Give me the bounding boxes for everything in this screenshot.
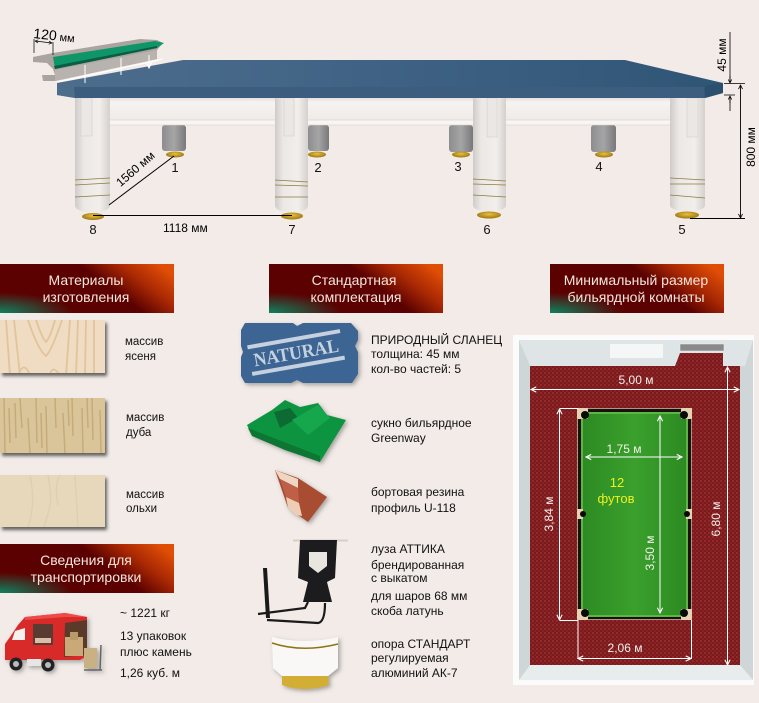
- text: cloth: [371, 416, 472, 445]
- room labels: 5,00 м: [619, 373, 653, 387]
- icon: natural slate: NATURAL: [252, 336, 340, 371]
- leg numbers: 1: [171, 160, 179, 175]
- table size label: футов: [598, 491, 635, 506]
- text: support: [371, 637, 471, 680]
- heading: standard equipment: Стандартная: [312, 272, 396, 288]
- swatch: alder wood: массив: [126, 489, 164, 501]
- dimension: 45 mm: 45 мм: [715, 38, 729, 72]
- room plan: [513, 335, 754, 685]
- text: rubber: бортовая резина: [371, 485, 465, 499]
- icon: red truck: [5, 613, 102, 672]
- text: cloth: Greenway: [371, 431, 426, 445]
- heading: transport info: транспортировки: [31, 569, 141, 585]
- icon: natural slate: [241, 323, 358, 383]
- text: slate: толщина: 45 мм: [371, 347, 460, 361]
- snooker table plan: [577, 408, 692, 620]
- room dimensions: [531, 367, 739, 665]
- window: [610, 344, 663, 358]
- text: support: опора СТАНДАРТ: [371, 637, 471, 651]
- transport text: плюс камень: [120, 645, 192, 659]
- heading: minimum room size: Минимальный размер: [564, 272, 708, 288]
- leg numbers: 6: [483, 222, 491, 237]
- front feet: [82, 212, 699, 220]
- icon: support leg: [272, 637, 338, 689]
- swatch: ash wood: массив: [125, 336, 163, 348]
- dimension: 1560 mm: 1560 мм: [113, 148, 158, 190]
- heading: minimum room size: бильярдной комнаты: [567, 289, 705, 305]
- text: slate: ПРИРОДНЫЙ СЛАНЕЦ: [371, 332, 502, 347]
- pockets: [577, 408, 692, 620]
- swatch: alder wood: [0, 475, 164, 527]
- apron: [75, 98, 705, 125]
- dimension: 800 mm: [690, 85, 758, 218]
- text: cloth: сукно бильярдное: [371, 416, 472, 430]
- swatch: oak wood: дуба: [126, 427, 152, 439]
- leg numbers: 8: [89, 222, 97, 237]
- swatch: oak wood: массив: [126, 412, 164, 424]
- text: rubber: [371, 485, 465, 515]
- text: slate: кол-во частей: 5: [371, 362, 461, 376]
- swatch: ash wood: [0, 320, 163, 373]
- room labels: 3,50 м: [643, 536, 657, 570]
- transport text: ~ 1221 кг: [120, 606, 171, 620]
- room labels: 3,84 м: [542, 497, 556, 531]
- dimension: 120 mm: 120 мм: [33, 25, 76, 45]
- heading: standard equipment: [269, 264, 443, 313]
- swatch: ash wood: ясеня: [125, 351, 156, 363]
- text: pocket: [371, 542, 467, 618]
- text: pocket: для шаров 68 мм: [371, 589, 467, 603]
- dimension: 45 mm: [715, 32, 745, 111]
- back legs: [162, 125, 616, 158]
- dimension: 1118 mm: 1118 мм: [163, 221, 208, 235]
- heading: materials: Материалы: [49, 272, 123, 288]
- text: pocket: брендированная: [371, 558, 464, 572]
- slate top: [57, 60, 723, 98]
- heading: minimum room size: [550, 264, 724, 313]
- text: slate: [371, 332, 502, 376]
- transport text: 1,26 куб. м: [120, 666, 180, 680]
- room frame: [513, 335, 754, 685]
- icon: green cloth: [247, 400, 346, 462]
- leg numbers: 2: [314, 160, 322, 175]
- swatch: alder wood: ольхи: [126, 503, 157, 515]
- leg numbers: [89, 159, 686, 237]
- table size label: 12: [610, 475, 624, 490]
- room labels: [542, 373, 723, 655]
- heading: standard equipment: комплектация: [311, 289, 401, 305]
- billiard table side view: [57, 60, 723, 220]
- leg numbers: 5: [678, 222, 686, 237]
- cushion rail detail: [33, 39, 164, 83]
- transport text: [120, 606, 192, 680]
- dimension: 120 mm: [33, 25, 76, 55]
- dimension: 1560 mm: [109, 148, 174, 205]
- carpet: [530, 353, 740, 665]
- text: pocket: скоба латунь: [371, 604, 444, 618]
- front legs: [75, 98, 705, 212]
- heading: materials: изготовления: [43, 289, 129, 305]
- room labels: 2,06 м: [608, 641, 642, 655]
- icon: cushion rubber: [275, 470, 327, 522]
- leg numbers: 7: [288, 222, 296, 237]
- text: rubber: профиль U-118: [371, 501, 456, 515]
- swatch: oak wood: [0, 398, 164, 453]
- leg numbers: 4: [595, 159, 603, 174]
- heading: transport info: [0, 544, 174, 593]
- text: pocket: луза АТТИКА: [371, 542, 445, 556]
- heading: transport info: Сведения для: [40, 552, 132, 568]
- text: support: регулируемая: [371, 651, 449, 665]
- text: support: алюминий АК-7: [371, 666, 458, 680]
- room labels: 6,80 м: [709, 502, 723, 536]
- arrows: [85, 55, 149, 83]
- transport text: 13 упаковок: [120, 629, 187, 643]
- room labels: 1,75 м: [607, 442, 641, 456]
- icon: pocket: [258, 540, 348, 623]
- vent: [680, 344, 724, 351]
- dimension: 800 mm: 800 мм: [744, 127, 758, 167]
- table size label: [598, 475, 635, 506]
- heading: materials: [0, 264, 174, 313]
- text: pocket: с выкатом: [371, 571, 428, 585]
- leg numbers: 3: [454, 159, 462, 174]
